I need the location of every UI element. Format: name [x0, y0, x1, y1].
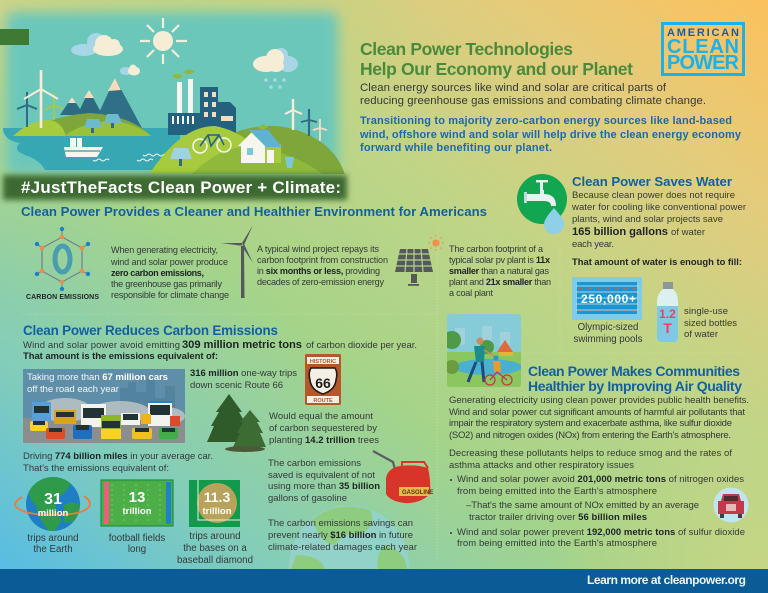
left hills [13, 113, 151, 136]
icon: gasoline can: GASOLINE [402, 490, 433, 496]
icon: solar panel with sun [395, 235, 444, 286]
text: 309 million metric tons: of carbon dioxide per year. [306, 340, 417, 351]
bullet: sulfur dioxide: Wind and solar power prevent 192,000 metric tons of sulfur dioxide [457, 527, 745, 538]
graphic: 1.2 T bottles [657, 282, 678, 342]
text: single-use bottles: single-use [684, 306, 728, 317]
section heading: air quality [528, 363, 742, 394]
factory [168, 70, 236, 135]
icon: sun [140, 18, 187, 64]
text: zero carbon emissions: responsible for climate change [111, 290, 229, 300]
graphic: 1.2 T bottles: 1.2 [659, 307, 676, 321]
bullet: nitrogen oxides: –That's the same amount of NOx emitted by an average [466, 500, 699, 511]
caption: trips around the Earth: trips around [27, 533, 79, 544]
text: Route 66 trips: down scenic Route 66 [190, 380, 283, 391]
text: solar carbon footprint: a coal plant [449, 288, 493, 298]
text: decreasing pollutants: Decreasing these pollutants helps to reduce smog and the rates of [449, 448, 732, 459]
graphic: 250,000+ swimming pools [572, 277, 642, 320]
hero illustration: clean energy landscape [0, 12, 345, 176]
text: public health benefits [449, 395, 749, 441]
header intro [360, 82, 706, 107]
text: 774 billion miles: Driving 774 billion miles in your average car. [23, 451, 213, 462]
header heading: Clean Power Technologies [360, 39, 573, 59]
text: public health benefits: Generating electricity using clean power provides public health benefits. [449, 395, 749, 406]
text: solar carbon footprint: typical solar pv plant is 11x [449, 255, 550, 265]
caption: Olympic pools: Olympic-sized [578, 322, 638, 333]
graphic: 13 trillion football fields: trillion [122, 506, 152, 517]
right hills [148, 125, 345, 176]
text: single-use bottles [684, 306, 737, 340]
header blue statement: Transitioning to majority zero-carbon energy sources like land-based [360, 115, 732, 127]
text: solar carbon footprint: The carbon footprint of a [449, 244, 544, 254]
icon: Route 66 sign [305, 354, 341, 405]
caption: football fields long: long [128, 544, 146, 555]
header blue statement: wind, offshore wind and solar will help drive the clean energy economy [359, 129, 742, 141]
logo: American Clean Power: CLEAN [667, 36, 739, 58]
mountains [60, 78, 143, 130]
text: 774 billion miles: That's the emissions equivalent of: [23, 463, 169, 474]
header blue statement [359, 115, 742, 154]
text: 309 million metric tons: That amount is the emissions equivalent of: [23, 351, 218, 362]
text: Route 66 trips: 316 million one-way trips [190, 368, 297, 379]
text: zero carbon emissions: the greenhouse gas primarily [111, 279, 222, 289]
text: decreasing pollutants: asthma attacks and other respiratory issues [449, 460, 634, 471]
caption: trips around bases [177, 531, 253, 566]
bullet: sulfur dioxide: from being emitted into the Earth's atmosphere [457, 538, 657, 549]
caption: trips around bases: trips around [189, 531, 241, 542]
footer bar [0, 569, 768, 593]
small solar panels [84, 114, 122, 133]
text: 309 million metric tons [23, 339, 417, 362]
water [3, 128, 180, 170]
text: $16 billion damages [268, 518, 417, 553]
text: $16 billion damages: climate-related damages each year [268, 542, 417, 553]
text: saves water body [571, 190, 746, 267]
bullet: nitrogen oxides: Wind and solar power avoid 201,000 metric tons of nitrogen oxides [457, 474, 744, 485]
text: solar carbon footprint: smaller than a natural gas [449, 266, 549, 276]
graphic: 31 million trips around Earth [15, 477, 90, 535]
text: wind repays carbon footprint [257, 244, 388, 287]
text: 309 million metric tons: Wind and solar power avoid emitting [23, 340, 180, 351]
caption: Olympic pools [574, 322, 643, 345]
text: solar carbon footprint: plant and 21x smaller than [449, 277, 551, 287]
footer bar: Learn more at cleanpower.org [587, 573, 746, 587]
text: 14.2 trillion trees: of carbon sequestered by [269, 423, 377, 434]
image: traffic with 67 million cars text [23, 369, 185, 443]
image: parent and child in park [443, 314, 522, 387]
caption: trips around the Earth [27, 533, 79, 555]
section heading: saves water: Clean Power Saves Water [572, 174, 732, 189]
text: decreasing pollutants [449, 448, 732, 471]
graphic: 13 trillion football fields: 13 [129, 489, 145, 506]
text: public health benefits: Wind and solar power cut significant amounts of harmful air pollutants that [449, 407, 745, 418]
text: 35 billion gallons: using more than 35 billion [268, 481, 380, 492]
section heading: air quality: Healthier by Improving Air Quality [528, 378, 742, 394]
header heading: Help Our Economy and our Planet [360, 59, 633, 79]
graphic: 11.3 trillion baseball diamond [189, 480, 240, 527]
text: Route 66 trips [190, 368, 297, 391]
text: single-use bottles: of water [684, 329, 718, 340]
text: public health benefits: (SO2) and nitrogen oxides (NOx) from entering the Earth's atmosphere. [449, 430, 731, 441]
graphic: 250,000+ swimming pools: 250,000+ [581, 292, 636, 306]
logo: American Clean Power: AMERICAN [667, 27, 739, 39]
icon: Route 66 sign: ROUTE [313, 398, 333, 404]
icon: clouds [71, 33, 298, 89]
graphic: 13 trillion football fields [101, 480, 173, 526]
icon: water tap with drop [517, 174, 567, 234]
bullet: sulfur dioxide [450, 527, 745, 549]
graphic: 31 million trips around Earth: 31 [44, 491, 62, 508]
graphic: 11.3 trillion baseball diamond: 11.3 [204, 489, 230, 505]
text: saves water body: Because clean power does not require [572, 190, 735, 201]
header blue statement: forward while benefiting our planet. [360, 142, 552, 154]
text: saves water body: each year. [572, 239, 614, 250]
bullet: nitrogen oxides [450, 474, 744, 523]
caption: trips around bases: baseball diamond [177, 555, 253, 566]
header intro: Clean energy sources like wind and solar are critical parts of [360, 82, 667, 94]
bullet: nitrogen oxides: tractor trailer driving over 56 billion miles [469, 512, 647, 523]
right wind turbines [285, 99, 327, 141]
text: zero carbon emissions [110, 245, 229, 300]
ship [64, 138, 167, 161]
caption: football fields long [109, 533, 165, 555]
vehicles [30, 401, 180, 439]
text: zero carbon emissions: zero carbon emissions, [111, 268, 204, 278]
icon: Route 66 sign: 66 [315, 375, 331, 391]
caption: trips around the Earth: the Earth [33, 544, 73, 555]
text: 35 billion gallons: saved is equivalent of not [268, 470, 375, 481]
left wind turbines [17, 70, 63, 128]
text: 35 billion gallons [268, 458, 380, 504]
text: single-use bottles: sized bottles [684, 318, 737, 329]
text: wind repays carbon footprint: decades of zero-emission energy [257, 277, 384, 287]
graphic: 1.2 T bottles: T [663, 320, 672, 336]
icon: gasoline can [373, 451, 433, 503]
solar panel on hill [170, 148, 192, 166]
image: traffic with 67 million cars text: Taking more than 67 million cars [27, 372, 168, 383]
text: zero carbon emissions: When generating electricity, [111, 245, 218, 255]
logo: American Clean Power [662, 24, 744, 74]
icon: Route 66 sign: HISTORIC [310, 359, 336, 365]
icon: wind turbine [221, 225, 253, 298]
section heading: air quality: Clean Power Makes Communities [528, 363, 740, 379]
text: 14.2 trillion trees [269, 411, 379, 446]
text: saves water body: water for cooling like conventional power [571, 202, 746, 213]
text: wind repays carbon footprint: A typical wind project repays its [257, 244, 379, 254]
text: saves water body: plants, wind and solar projects save [572, 214, 723, 225]
text: saves water body: 165 billion gallons [572, 226, 668, 238]
text: 14.2 trillion trees: planting 14.2 trillion trees [269, 435, 379, 446]
text: 35 billion gallons: The carbon emissions [268, 458, 361, 469]
text: public health benefits: impair the respiratory system and exacerbate asthma, like sulfur dioxide [449, 418, 732, 429]
caption: Olympic pools: swimming pools [574, 334, 643, 345]
text: 35 billion gallons: gallons of gasoline [268, 493, 347, 504]
caption: trips around bases: the bases on a [183, 543, 247, 554]
section heading: reduces carbon emissions: Clean Power Reduces Carbon Emissions [23, 323, 278, 338]
text: zero carbon emissions: wind and solar power produce [110, 257, 228, 267]
text: saves water body: of water [671, 227, 705, 238]
logo: American Clean Power: POWER [667, 52, 740, 74]
dividers [22, 230, 745, 560]
text: wind repays carbon footprint: carbon footprint from construction [257, 255, 388, 265]
caption: football fields long: football fields [109, 533, 165, 544]
text: $16 billion damages: The carbon emissions savings can [268, 518, 413, 529]
icon: faint globe [289, 506, 409, 569]
image: traffic with 67 million cars text: off the road each year [27, 384, 120, 395]
header intro: reducing greenhouse gas emissions and combating climate change. [360, 95, 706, 107]
section heading: cleaner environment: Clean Power Provides a Cleaner and Healthier Environment for Americans [21, 204, 487, 219]
text: 14.2 trillion trees: Would equal the amount [269, 411, 373, 422]
text: 309 million metric tons: 309 million metric tons [182, 339, 302, 351]
house [238, 130, 294, 168]
text: solar carbon footprint [449, 244, 551, 298]
icon: carbon emissions molecule: CARBON EMISSIONS [26, 294, 99, 301]
graphic: 11.3 trillion baseball diamond: trillion [202, 506, 232, 517]
text: wind repays carbon footprint: in six months or less, providing [257, 266, 380, 276]
text: saves water body: That amount of water is enough to fill: [572, 256, 742, 267]
icon: truck [714, 488, 748, 522]
text: 774 billion miles [23, 451, 213, 474]
bullet: nitrogen oxides: from being emitted into the Earth's atmosphere [457, 486, 657, 497]
icon: carbon emissions molecule [26, 227, 99, 301]
icon: pine trees [207, 394, 266, 452]
text: $16 billion damages: prevent nearly $16 billion in future [268, 530, 413, 541]
bicycle [193, 135, 231, 153]
banner: #JustTheFacts: #JustTheFacts Clean Power + Climate: [21, 178, 341, 197]
header heading [360, 39, 633, 79]
graphic: 31 million trips around Earth: million [38, 508, 68, 519]
